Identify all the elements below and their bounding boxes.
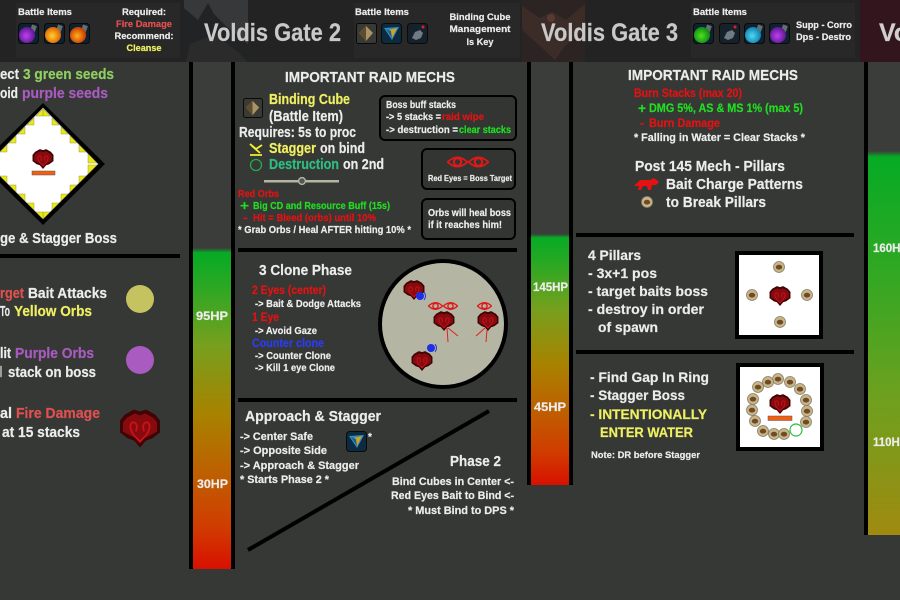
callout: boss buff stacks	[380, 96, 516, 140]
burn stacks notes	[634, 88, 806, 144]
red orbs notes	[238, 188, 412, 236]
heading: IMPORTANT RAID MECHS	[285, 69, 455, 86]
45HP marker: 45HP	[534, 402, 566, 414]
icon: binding cube	[243, 98, 263, 118]
health bar: gate 1	[189, 62, 235, 569]
gate 2 note: Management	[450, 24, 511, 35]
purple orbs text: stack on boss	[8, 365, 96, 381]
title: gate 3: Voldis Gate 3	[541, 19, 678, 47]
gate 2 note: Binding Cube	[450, 12, 510, 23]
callout: red eyes	[422, 149, 515, 189]
callout: boss buff stacks: clear stacks	[459, 125, 511, 136]
30HP marker: 30HP	[197, 477, 228, 491]
purple orbs text: Purple Orbs	[15, 346, 94, 362]
seed instructions: ect	[0, 66, 19, 83]
gate 2 note: Is Key	[466, 37, 494, 48]
yellow orbs text	[0, 286, 107, 320]
binding cube details: Stagger	[269, 141, 316, 157]
clone phase list	[252, 285, 361, 374]
clone phase list: 2 Eyes (center)	[252, 285, 326, 297]
header image: mountain	[184, 0, 248, 62]
icon: flag item	[346, 432, 366, 452]
four pillars list: - 3x+1 pos	[588, 265, 657, 281]
header band	[0, 0, 900, 62]
icon: boss	[120, 410, 160, 448]
yellow orbs text: rget	[0, 286, 24, 302]
gate 2 battle items label: Battle Items	[355, 7, 409, 17]
burn stacks notes: +	[638, 100, 646, 116]
seed instructions: purple seeds	[22, 85, 108, 102]
gate 3 roles	[796, 20, 852, 43]
icon: stagger	[250, 144, 262, 155]
binding cube details: Destruction	[269, 157, 339, 173]
stagger caption: ge & Stagger Boss	[0, 231, 117, 247]
seed instructions	[0, 66, 114, 102]
fire damage text	[0, 406, 100, 441]
purple orbs text: l	[0, 365, 2, 381]
slider decoration	[264, 178, 339, 184]
four pillars list	[588, 247, 708, 335]
yellow orbs text: To	[0, 304, 10, 320]
yellow orbs text: Yellow Orbs	[14, 304, 92, 320]
clone phase list: -> Avoid Gaze	[255, 326, 317, 337]
four pillars list: - target baits boss	[588, 283, 708, 299]
binding cube details: Requires: 5s to proc	[239, 125, 356, 141]
icon: pillar	[642, 196, 652, 208]
ring instructions	[590, 369, 709, 440]
ring instructions: ENTER WATER	[600, 424, 693, 440]
ring diagram	[738, 365, 822, 449]
icon: purple orb	[126, 346, 154, 374]
phase 2 list: Bind Cubes in Center <-	[392, 476, 514, 488]
red orbs notes: +	[240, 198, 249, 213]
145HP marker: 145HP	[533, 282, 568, 294]
approach list: -> Center Safe	[240, 431, 313, 443]
four pillars list: 4 Pillars	[588, 247, 641, 263]
binding cube details: on 2nd	[343, 157, 384, 173]
icon: yellow orb	[126, 285, 154, 313]
health bar: gate 2	[527, 62, 573, 485]
clone phase heading: 3 Clone Phase	[259, 263, 352, 279]
clone phase list: -> Kill 1 eye Clone	[255, 363, 335, 374]
gate 1 requirements: Fire Damage	[116, 19, 172, 30]
callout: boss buff stacks: -> destruction =	[386, 125, 458, 136]
burn stacks notes: * Falling in Water = Clear Stacks *	[634, 132, 806, 144]
header panel: gate 3 items	[691, 3, 855, 58]
burn stacks notes: Burn Stacks (max 20)	[634, 88, 742, 100]
approach list: -> Opposite Side	[240, 445, 327, 457]
purple orbs text: lit	[0, 346, 11, 362]
red orbs notes: Big CD and Resource Buff (15s)	[253, 200, 390, 212]
95HP marker: 95HP	[196, 309, 228, 323]
binding cube details	[239, 92, 384, 173]
burn stacks notes: DMG 5%, AS & MS 1% (max 5)	[649, 103, 803, 115]
bait charge text: Bait Charge Patterns	[666, 177, 803, 193]
callout: orbs heal boss: Orbs will heal boss	[428, 208, 511, 219]
ring instructions: - Stagger Boss	[590, 387, 685, 403]
callout: orbs heal boss	[422, 199, 515, 239]
callout: boss buff stacks: -> 5 stacks =	[386, 112, 441, 123]
asterisk: *	[368, 432, 372, 443]
header panel: gate 1 items	[16, 3, 180, 58]
approach list: -> Approach & Stagger	[240, 460, 360, 472]
ring instructions: - INTENTIONALLY	[590, 406, 708, 422]
fire damage text: at 15 stacks	[2, 425, 80, 441]
break pillars text: to Break Pillars	[666, 195, 766, 211]
binding cube details: on bind	[320, 141, 365, 157]
burn stacks notes: -	[640, 118, 644, 130]
gate 3 item icons	[694, 24, 790, 44]
health bar: next gate	[864, 62, 900, 535]
diamond arena diagram	[0, 103, 105, 225]
gate 1 requirements: Cleanse	[126, 43, 162, 53]
phase 2 list: Red Eyes Bait to Bind <-	[391, 490, 514, 502]
panel: gate 1 seeds	[0, 66, 180, 448]
yellow orbs text: Bait Attacks	[28, 286, 107, 302]
red orbs notes: -	[243, 212, 249, 224]
diagonal divider	[248, 411, 489, 550]
four pillars list: of spawn	[598, 319, 658, 335]
binding cube details: Binding Cube	[269, 92, 350, 108]
gate 1 requirements: Required:	[122, 7, 166, 17]
phase 2 list	[391, 476, 515, 517]
clone phase list: -> Bait & Dodge Attacks	[255, 299, 361, 310]
pillars heading: Post 145 Mech - Pillars	[635, 159, 785, 175]
gate 1 requirements	[114, 7, 174, 53]
clone phase list: -> Counter Clone	[255, 351, 331, 362]
panel: gate 2 raid mechs	[238, 69, 517, 550]
clone phase list: Counter clone	[252, 338, 324, 350]
callout: red eyes: Red Eyes = Boss Target	[428, 173, 512, 183]
gate 3 roles: Dps - Destro	[796, 32, 851, 43]
burn stacks notes: Burn Damage	[649, 118, 720, 130]
panel: gate 3 raid mechs	[576, 67, 854, 461]
purple orbs text	[0, 346, 96, 381]
note: Note: DR before Stagger	[591, 450, 700, 461]
fire damage text: al	[0, 406, 12, 422]
header image: red demon	[860, 0, 900, 62]
fire damage text: Fire Damage	[16, 406, 100, 422]
callout: boss buff stacks: raid wipe	[442, 112, 484, 123]
approach heading: Approach & Stagger	[245, 408, 381, 425]
red orbs notes: Red Orbs	[238, 188, 279, 200]
gate 1 requirements: Recommend:	[114, 31, 174, 41]
four pillars list: - destroy in order	[588, 301, 705, 317]
binding cube details: (Battle Item)	[269, 109, 343, 125]
gate 2 note	[450, 12, 511, 48]
ring instructions: - Find Gap In Ring	[590, 369, 709, 385]
callout: boss buff stacks: Boss buff stacks	[386, 100, 456, 111]
approach list	[240, 431, 360, 486]
gate 2 item icons	[356, 24, 428, 44]
clone phase list: 1 Eye	[252, 312, 279, 324]
title: gate 2: Voldis Gate 2	[204, 19, 341, 47]
callout: orbs heal boss: if it reaches him!	[428, 220, 502, 231]
header panel: gate 2 items	[354, 3, 520, 58]
red orbs notes: * Grab Orbs / Heal AFTER hitting 10% *	[238, 224, 412, 236]
seed instructions: oid	[0, 85, 18, 102]
header image: demon	[522, 0, 585, 62]
gate 3 roles: Supp - Corro	[796, 20, 852, 31]
icon: charging bull	[634, 178, 659, 190]
approach list: * Starts Phase 2 *	[240, 474, 330, 486]
phase 2 heading: Phase 2	[450, 454, 501, 470]
four pillars diagram	[737, 253, 821, 337]
gate 1 item icons	[18, 24, 90, 44]
phase 2 list: * Must Bind to DPS *	[408, 505, 515, 517]
red orbs notes: Hit = Bleed (orbs) until 10%	[253, 212, 377, 224]
icon: destruction ring	[250, 160, 262, 170]
heading: IMPORTANT RAID MECHS	[628, 67, 798, 84]
clone arena diagram	[380, 261, 506, 387]
gate 1 battle items label: Battle Items	[18, 7, 72, 17]
seed instructions: 3 green seeds	[23, 66, 114, 83]
gate 3 battle items label: Battle Items	[693, 7, 747, 17]
